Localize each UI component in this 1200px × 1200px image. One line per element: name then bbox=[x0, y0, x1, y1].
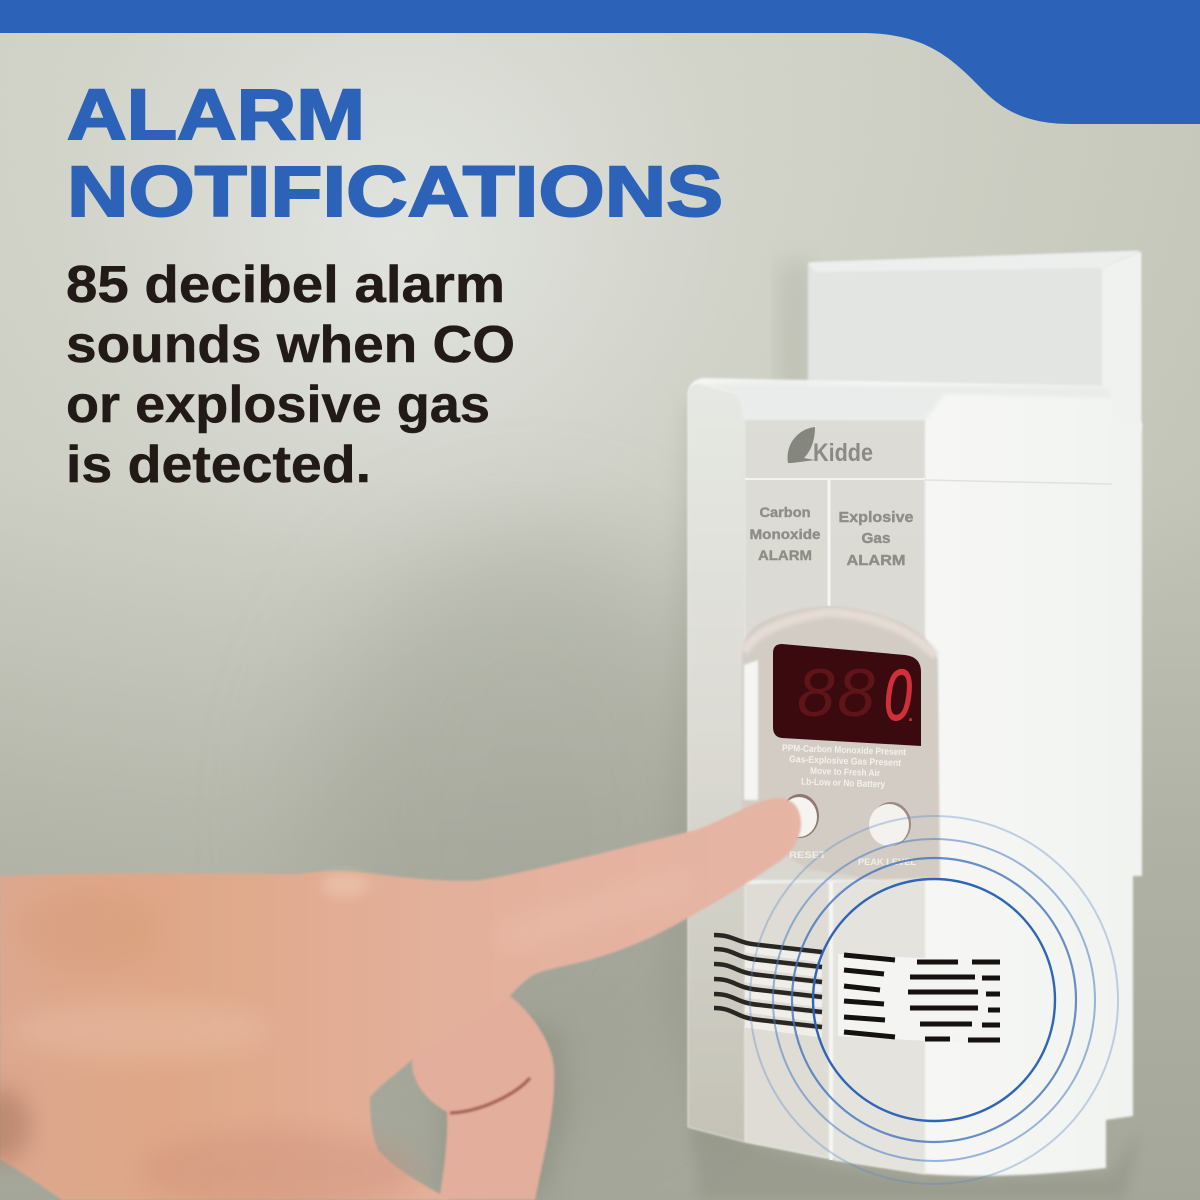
label: carbon monoxide alarm bbox=[750, 504, 821, 563]
shadow on the wall near the hand bbox=[440, 1000, 570, 1200]
detector top face bbox=[700, 384, 1112, 420]
title bbox=[67, 76, 723, 232]
finger crease bbox=[450, 1078, 530, 1113]
body text: is detected. bbox=[66, 436, 371, 494]
label: carbon monoxide alarm: Monoxide bbox=[750, 526, 821, 542]
detector wall plate bbox=[808, 251, 1141, 430]
detector body bbox=[688, 378, 1142, 1176]
shadow at lower left of the hand bbox=[0, 1087, 30, 1163]
lower housing bbox=[745, 882, 829, 1158]
brand logo bbox=[788, 427, 873, 467]
digital display: . bbox=[908, 705, 913, 725]
finger highlight bbox=[500, 880, 690, 940]
carbon monoxide detector bbox=[688, 251, 1142, 1176]
palm highlight bbox=[10, 1000, 270, 1060]
display legend: Move to Fresh Air bbox=[810, 766, 881, 779]
body text bbox=[66, 256, 515, 494]
display legend: PPM-Carbon Monoxide Present bbox=[782, 743, 907, 758]
button labels: PEAK LEVEL bbox=[858, 857, 916, 868]
body text: 85 decibel alarm bbox=[66, 256, 505, 314]
peak level button bbox=[869, 802, 911, 846]
sound wave rings bbox=[750, 816, 1118, 1184]
palm warm shading bbox=[20, 890, 160, 970]
detector left side bbox=[688, 384, 745, 1142]
control panel bbox=[742, 606, 940, 880]
palm and index finger bbox=[0, 798, 801, 1200]
label: explosive gas alarm: Explosive bbox=[838, 509, 914, 526]
label: carbon monoxide alarm: ALARM bbox=[758, 547, 812, 563]
button labels bbox=[789, 850, 916, 868]
display legend: Lb-Low or No Battery bbox=[801, 777, 886, 790]
hand pressing the button bbox=[0, 798, 801, 1200]
body text: or explosive gas bbox=[66, 376, 490, 434]
detector front panel bbox=[745, 420, 925, 880]
brand logo: Kidde bbox=[813, 439, 873, 467]
digital display: 88 bbox=[797, 655, 875, 731]
label: explosive gas alarm bbox=[838, 509, 914, 569]
knuckle highlight bbox=[321, 873, 369, 897]
reset button bbox=[781, 794, 819, 838]
display legend bbox=[782, 743, 907, 790]
title: NOTIFICATIONS bbox=[67, 153, 723, 232]
body text: sounds when CO bbox=[66, 316, 515, 374]
digital display: 0 bbox=[884, 656, 912, 736]
left speaker vents bbox=[714, 935, 822, 1034]
label: explosive gas alarm: Gas bbox=[862, 530, 890, 547]
label: explosive gas alarm: ALARM bbox=[846, 552, 906, 569]
button labels: RESET bbox=[789, 850, 826, 861]
title: ALARM bbox=[67, 76, 365, 155]
digital display bbox=[773, 644, 921, 746]
label: carbon monoxide alarm: Carbon bbox=[760, 504, 810, 520]
right speaker vents bbox=[838, 954, 1000, 1045]
blue top banner bbox=[0, 0, 1200, 124]
middle finger bbox=[412, 995, 554, 1200]
display legend: Gas-Explosive Gas Present bbox=[789, 754, 902, 769]
